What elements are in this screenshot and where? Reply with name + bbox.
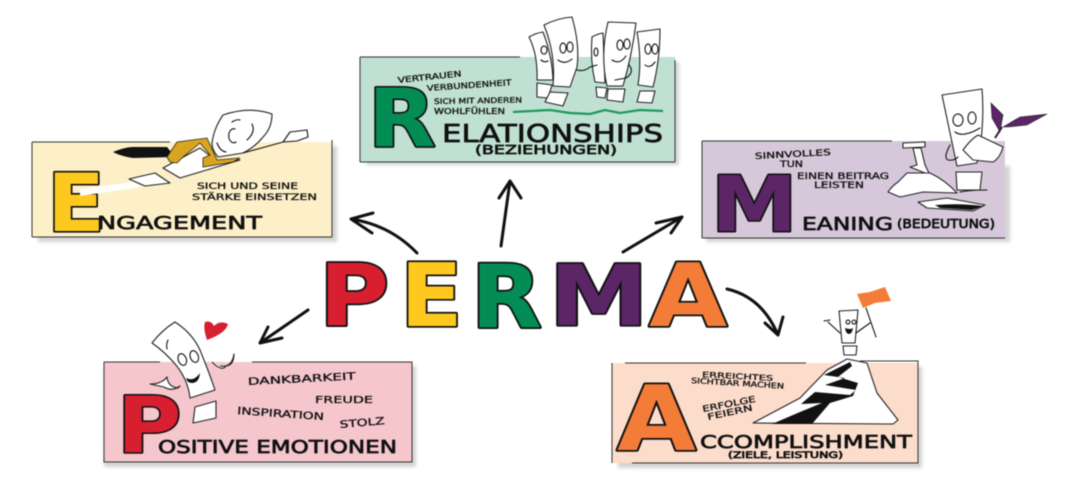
character: with plant [942,89,1047,190]
keywords: relationships [397,69,522,116]
heading: Accomplishment: CCOMPLISHMENT [700,432,913,453]
arrow: to Engagement [351,213,417,253]
panel: Positive Emotionen [104,322,416,471]
panel: Relationships [360,17,679,165]
keywords: positive emotions: FREUDE [315,395,373,406]
keywords: engagement: SICH UND SEINE [197,182,298,192]
arrow: to Meaning [623,217,682,252]
keywords: engagement: STÄRKE EINSETZEN [192,192,317,203]
arrow: to Positive Emotionen [260,310,308,343]
keywords: meaning [755,148,889,191]
characters: group of friends [529,17,660,106]
big letter A: A [617,367,696,472]
keywords: meaning: EINEN BEITRAG [797,172,889,182]
icon: heart [204,322,228,340]
keywords: meaning: TUN [779,160,803,170]
arrow: to Accomplishment [727,289,783,335]
illustration: mountain [753,359,898,424]
panel: Engagement [32,110,337,250]
panel: Meaning [702,89,1047,250]
title: PERMA: E [400,246,463,347]
keywords: positive emotions: STOLZ [339,416,385,431]
keywords: positive emotions: INSPIRATION [237,406,324,423]
big letter R: R [368,72,436,165]
keywords: positive emotions: DANKBARKEIT [248,371,357,388]
arrow: to Relationships [499,181,521,246]
character: happy with heart [150,322,234,423]
heading: Meaning: EANING [802,214,893,235]
illustration: shovel and soil [888,142,987,211]
keywords: engagement [192,182,317,203]
keywords: relationships: WOHLFÜHLEN [434,107,505,116]
keywords: relationships: SICH MIT ANDEREN [434,95,522,106]
title: PERMA: P [319,246,389,346]
title: PERMA: A [649,247,727,347]
green scribble [513,110,663,114]
character: flying superhero [80,110,308,196]
keywords: accomplishment: ERFOLGE [702,395,757,415]
heading: Engagement: NGAGEMENT [97,213,263,234]
keywords: accomplishment: SICHTBAR MACHEN [691,376,784,391]
subheading: Beziehungen: (BEZIEHUNGEN) [475,143,617,157]
character: with flag [824,287,891,355]
keywords: accomplishment: ERREICHTES [702,370,774,383]
heading: Positive Emotionen: OSITIVE EMOTIONEN [158,437,397,458]
big letter P: P [117,380,181,471]
keywords: relationships: VERTRAUEN [397,69,462,85]
heading: Relationships: ELATIONSHIPS [442,119,663,148]
title: PERMA [319,246,727,348]
keywords: positive emotions [237,371,385,431]
keywords: meaning: SINNVOLLES [755,148,831,162]
subheading: Ziele, Leistung: (ZIELE, LEISTUNG) [728,451,843,461]
keywords: accomplishment [691,370,784,423]
keywords: meaning: LEISTEN [814,181,864,191]
panel: Accomplishment [612,287,922,472]
subheading: Bedeutung: (BEDEUTUNG) [897,217,995,231]
big letter M: M [711,161,798,250]
icon: flag [857,287,891,308]
big letter E: E [47,157,105,250]
title: PERMA: M [549,247,649,345]
keywords: accomplishment: FEIERN [707,404,754,423]
keywords: relationships: VERBUNDENHEIT [427,78,512,93]
title: PERMA: R [471,247,542,348]
